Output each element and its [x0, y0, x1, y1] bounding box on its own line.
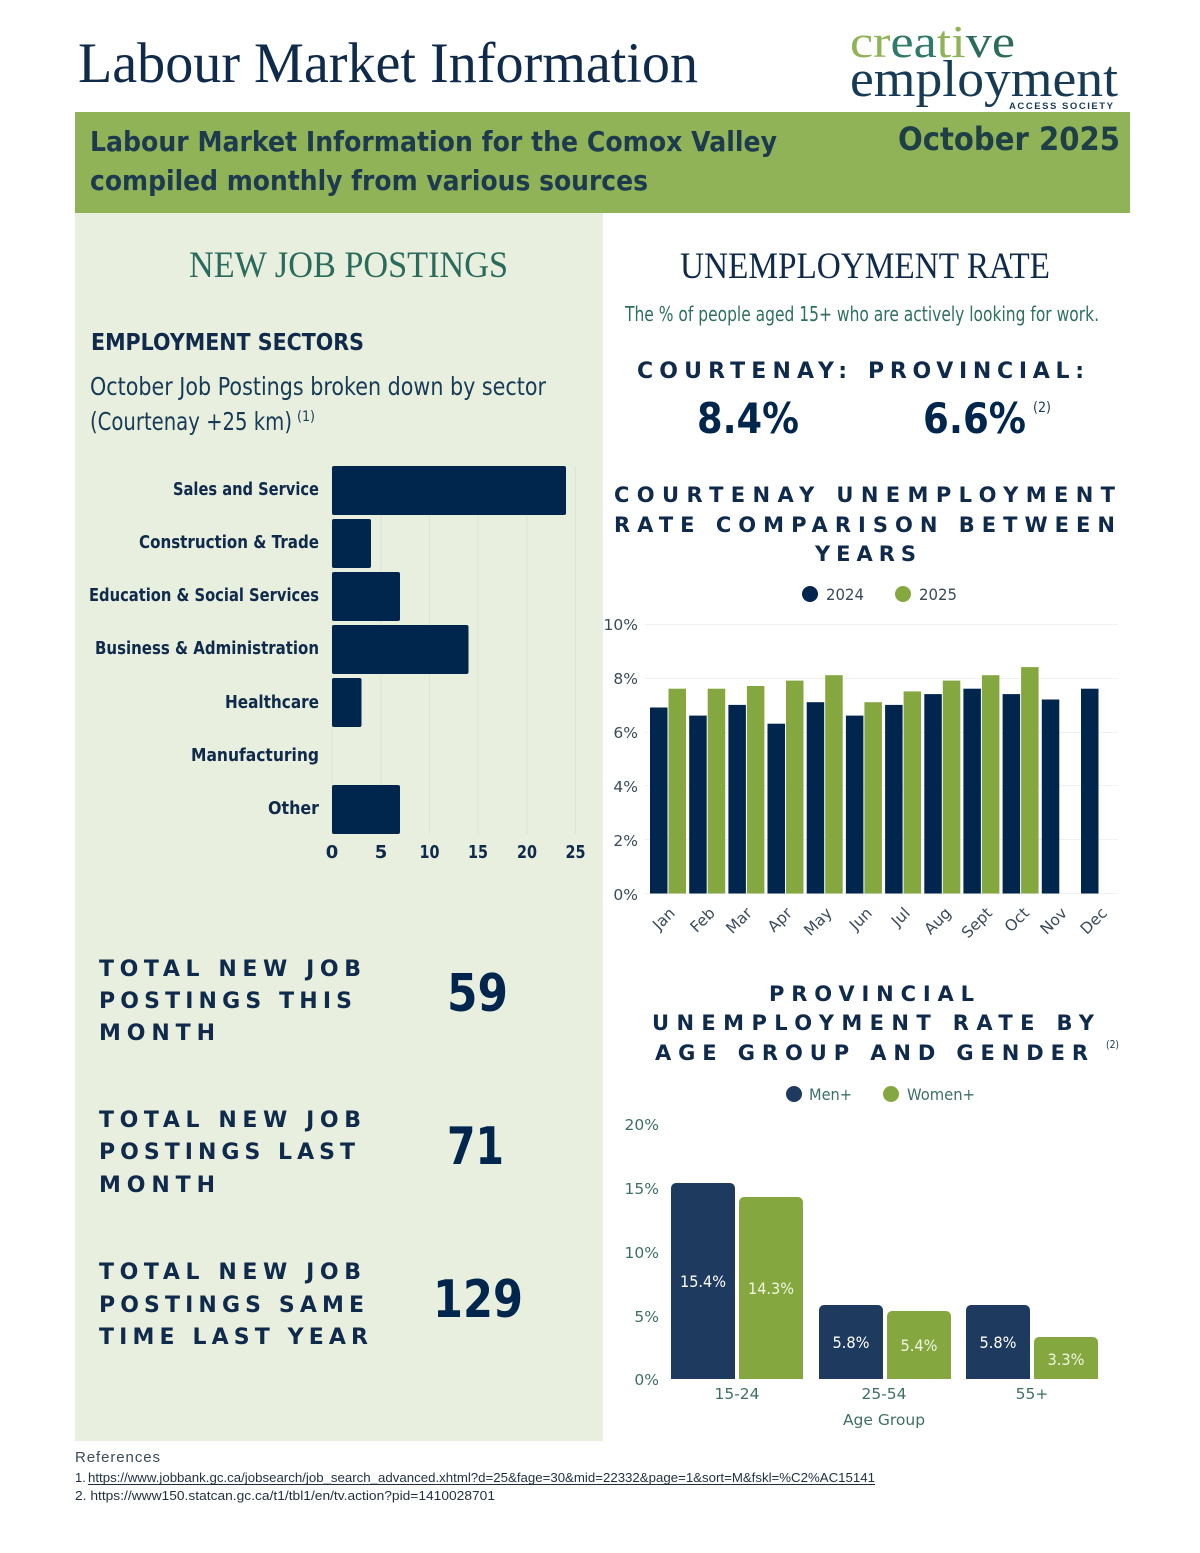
- bar chart: employment sectors: 10: [420, 842, 440, 863]
- bar chart: courtenay unemployment by month: 4%: [613, 778, 638, 796]
- heading: provincial rate by age and gender: [652, 982, 1119, 1065]
- bar chart: employment sectors: 20: [517, 842, 537, 863]
- bar chart: provincial unemployment by age group: 15%: [625, 1180, 659, 1198]
- bar chart: employment sectors: Other: [268, 798, 319, 819]
- heading: new job postings: NEW JOB POSTINGS: [189, 245, 508, 286]
- references: [75, 1449, 875, 1503]
- bar chart: courtenay unemployment by month: Nov: [1037, 904, 1071, 938]
- stat: same time last year: 129: [433, 1270, 523, 1330]
- sector description: [90, 372, 547, 436]
- stat: total last month: POSTINGS LAST: [99, 1140, 355, 1165]
- bar chart: courtenay unemployment by month: Jan: [648, 904, 679, 934]
- stat: total this month: [99, 957, 508, 1046]
- bar chart: courtenay unemployment by month: Feb: [687, 904, 719, 936]
- bar chart: courtenay unemployment by month: Aug: [921, 904, 955, 938]
- references: https://www.jobbank.gc.ca/jobsearch/job_search_advanced.xhtml?d=25&fage=30&mid=22332&page=1&sort=M&fskl=%C2%AC15141: [88, 1470, 875, 1485]
- stat: total last month: [99, 1108, 504, 1198]
- legend: gender: Men+: [809, 1085, 852, 1104]
- bar chart: provincial unemployment by age group: 5.4%: [900, 1336, 938, 1355]
- bar chart: provincial unemployment by age group: 15.4%: [680, 1272, 726, 1291]
- banner heading: Labour Market Information for the Comox Valley: [90, 125, 777, 158]
- bar chart: courtenay unemployment by month: May: [800, 904, 836, 939]
- stat: total last month: TOTAL NEW JOB: [99, 1108, 361, 1133]
- bar chart: provincial unemployment by age group: 5.8%: [832, 1333, 870, 1352]
- bar chart: provincial unemployment by age group: 15-24: [714, 1385, 760, 1403]
- bar chart: courtenay unemployment by month: Jun: [845, 904, 876, 935]
- sector description: (Courtenay +25 km): [90, 407, 292, 436]
- bar chart: provincial unemployment by age group: 14.3%: [748, 1279, 794, 1298]
- legend: years: 2024: [826, 585, 864, 604]
- bar chart: employment sectors: [89, 466, 586, 863]
- bar chart: courtenay unemployment by month: Apr: [764, 904, 796, 936]
- bar chart: provincial unemployment by age group: 3.3%: [1048, 1350, 1084, 1369]
- heading: provincial rate by age and gender: AGE GROUP AND GENDER: [655, 1041, 1088, 1065]
- bar chart: courtenay unemployment by month: Dec: [1077, 904, 1111, 938]
- bar chart: courtenay unemployment by month: 2%: [613, 832, 638, 850]
- stat: total last month: MONTH: [99, 1173, 215, 1198]
- legend: gender: Women+: [907, 1085, 975, 1104]
- sector description: (1): [297, 409, 315, 425]
- stat: courtenay rate: [637, 359, 847, 443]
- bar chart: courtenay unemployment by month: 0%: [613, 886, 638, 904]
- stat: courtenay rate: 8.4%: [697, 394, 799, 443]
- logo: creative employment access society: ACCESS SOCIETY: [1009, 101, 1114, 112]
- logo: creative employment access society: employment: [850, 51, 1119, 108]
- bar chart: provincial unemployment by age group: 55+: [1016, 1385, 1048, 1403]
- bar chart: courtenay unemployment by month: Oct: [1001, 904, 1033, 936]
- date: October 2025: [898, 120, 1120, 158]
- legend: gender: [786, 1085, 975, 1104]
- stat: courtenay rate: COURTENAY:: [637, 359, 847, 384]
- stat: same time last year: POSTINGS SAME: [99, 1293, 364, 1318]
- stat: total last month: 71: [447, 1117, 504, 1177]
- heading: courtenay comparison: COURTENAY UNEMPLOYMENT: [614, 483, 1116, 507]
- logo: creative employment access society: [850, 16, 1119, 112]
- stat: same time last year: TIME LAST YEAR: [99, 1325, 368, 1350]
- legend: years: 2025: [919, 585, 957, 604]
- bar chart: courtenay unemployment by month: 10%: [604, 616, 638, 634]
- heading: provincial rate by age and gender: UNEMPLOYMENT RATE BY: [652, 1011, 1095, 1035]
- stat: provincial rate: 6.6%: [923, 394, 1026, 443]
- panel: new job postings: [75, 213, 603, 1441]
- stat: total this month: 59: [447, 964, 508, 1024]
- bar chart: employment sectors: 25: [566, 842, 586, 863]
- bar chart: courtenay unemployment by month: Mar: [722, 904, 756, 938]
- bar chart: provincial unemployment by age group: [625, 1116, 1098, 1429]
- title: Labour Market Information: [78, 32, 698, 95]
- bar chart: employment sectors: Education & Social Services: [89, 585, 319, 606]
- bar chart: provincial unemployment by age group: 10%: [625, 1244, 659, 1262]
- stat: same time last year: TOTAL NEW JOB: [99, 1260, 361, 1285]
- stat: provincial rate: (2): [1033, 400, 1051, 416]
- heading: courtenay comparison: RATE COMPARISON BETWEEN: [614, 513, 1115, 537]
- bar chart: employment sectors: Construction & Trade: [139, 532, 319, 553]
- bar chart: provincial unemployment by age group: Age Group: [843, 1411, 925, 1429]
- stat: total this month: TOTAL NEW JOB: [99, 957, 361, 982]
- heading: courtenay comparison: YEARS: [814, 542, 916, 566]
- heading: provincial rate by age and gender: (2): [1106, 1038, 1119, 1051]
- bar chart: provincial unemployment by age group: 5%: [634, 1308, 659, 1326]
- stat: same time last year: [99, 1260, 523, 1350]
- bar chart: courtenay unemployment by month: Jul: [887, 904, 914, 931]
- heading: unemployment rate: UNEMPLOYMENT RATE: [680, 246, 1050, 287]
- bar chart: employment sectors: 5: [375, 842, 387, 863]
- stat: total this month: POSTINGS THIS: [99, 989, 352, 1014]
- sector description: October Job Postings broken down by sector: [90, 372, 547, 401]
- banner heading: compiled monthly from various sources: [90, 164, 648, 197]
- bar chart: employment sectors: Business & Administration: [95, 638, 319, 659]
- stat: total this month: MONTH: [99, 1021, 215, 1046]
- bar chart: employment sectors: Healthcare: [225, 692, 319, 713]
- references: 1.: [75, 1470, 86, 1485]
- references: References: [75, 1449, 160, 1466]
- bar chart: provincial unemployment by age group: 25-54: [861, 1385, 907, 1403]
- bar chart: courtenay unemployment by month: [604, 616, 1118, 942]
- bar chart: courtenay unemployment by month: Sept: [958, 904, 996, 942]
- bar chart: courtenay unemployment by month: 8%: [613, 670, 638, 688]
- stat: provincial rate: [868, 359, 1084, 443]
- heading: courtenay comparison: [614, 483, 1116, 566]
- banner heading: [90, 125, 777, 197]
- bar chart: employment sectors: Sales and Service: [173, 479, 319, 500]
- heading: employment sectors: EMPLOYMENT SECTORS: [91, 330, 364, 356]
- bar chart: courtenay unemployment by month: 6%: [613, 724, 638, 742]
- bar chart: provincial unemployment by age group: 5.8%: [980, 1333, 1016, 1352]
- references: 2. https://www150.statcan.gc.ca/t1/tbl1/en/tv.action?pid=1410028701: [75, 1488, 495, 1503]
- stat: provincial rate: PROVINCIAL:: [868, 359, 1084, 384]
- bar chart: provincial unemployment by age group: 20%: [625, 1116, 659, 1134]
- bar chart: employment sectors: Manufacturing: [191, 745, 319, 766]
- bar chart: provincial unemployment by age group: 0%: [634, 1371, 659, 1389]
- banner: [75, 112, 1130, 213]
- bar chart: employment sectors: 15: [468, 842, 488, 863]
- heading: provincial rate by age and gender: PROVINCIAL: [769, 982, 974, 1006]
- bar chart: employment sectors: 0: [326, 842, 338, 863]
- legend: years: [802, 585, 957, 604]
- logo: creative employment access society: creative: [850, 16, 1015, 67]
